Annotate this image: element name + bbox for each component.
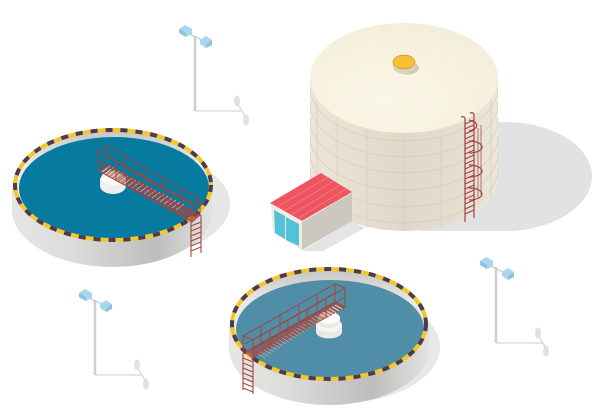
small building <box>270 173 365 251</box>
left tank central hub <box>100 171 126 194</box>
street lamp: bottom left <box>79 289 149 390</box>
large storage tank <box>310 23 592 231</box>
bottom tank central hub <box>316 312 342 338</box>
storage tank roof <box>310 23 498 133</box>
bottom tank catwalk <box>243 284 345 358</box>
glass doors <box>274 210 299 246</box>
left tank water <box>19 137 209 239</box>
storage tank shadow <box>420 122 592 231</box>
bottom tank inner wall <box>231 268 427 380</box>
left clarifier tank <box>12 129 230 267</box>
bottom tank hazard rim <box>232 269 426 379</box>
red roof <box>270 173 352 221</box>
street lamp: right <box>480 257 549 356</box>
storage tank wall <box>310 78 498 231</box>
left tank inner wall <box>14 129 212 241</box>
left tank catwalk <box>98 146 200 222</box>
building front wall <box>271 204 302 250</box>
left tank ladder <box>191 215 201 257</box>
bottom tank shadow <box>240 291 440 403</box>
building shadow <box>302 221 365 251</box>
left tank shadow <box>30 150 230 258</box>
street lamp: top <box>179 25 249 126</box>
storage tank panel lines <box>310 87 498 231</box>
left tank hazard rim <box>15 130 211 240</box>
storage tank ladder <box>461 113 482 222</box>
left tank outer wall <box>12 186 213 267</box>
roof hatch <box>393 55 419 74</box>
bottom tank water <box>236 280 424 378</box>
bottom clarifier tank <box>229 268 440 405</box>
building side wall <box>302 193 352 250</box>
bottom tank outer wall <box>229 324 429 405</box>
roof seams <box>277 177 346 219</box>
bottom tank ladder <box>243 353 253 394</box>
